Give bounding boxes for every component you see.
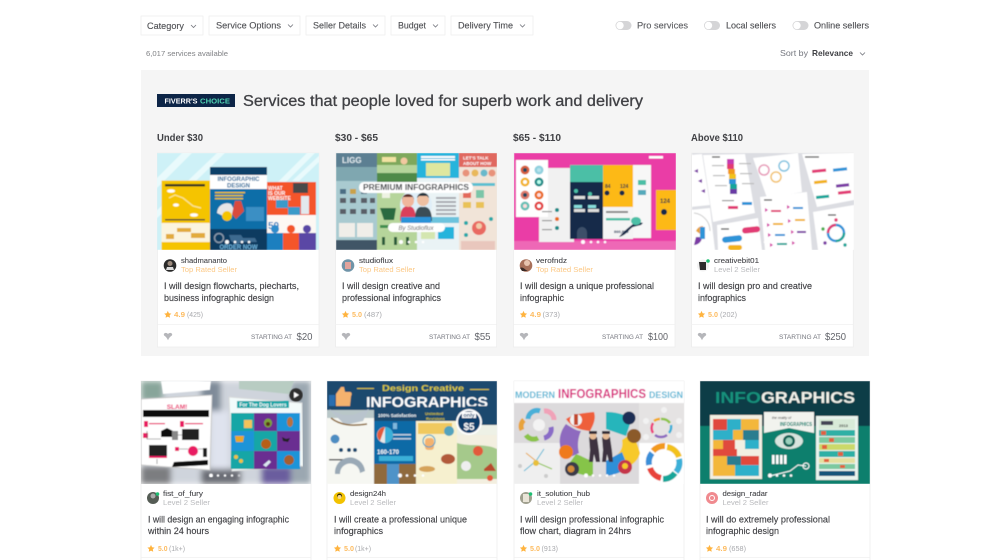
thumbnail: premium infographics: By Studioflux: [398, 226, 435, 232]
rating: (1k+): [169, 544, 185, 553]
thumbnail: modern infographics design: DESIGN: [649, 390, 683, 400]
gig title: [342, 281, 441, 303]
price: [779, 331, 846, 343]
badge: FIVERR'S: [164, 98, 198, 105]
rating: 4.9: [174, 310, 185, 319]
gig title: professional infographics: [342, 293, 441, 303]
seller avatar: [334, 492, 346, 504]
gig title: [520, 514, 664, 536]
seller name: verofndz: [536, 256, 567, 265]
thumbnail: infographics posters: INFOGRAPHICS: [780, 422, 812, 428]
thumbnail: infographic design: INFOGRAPHIC: [218, 177, 260, 183]
toggle: online sellers: Online sellers: [814, 20, 869, 30]
seller name: fist_of_fury: [163, 489, 203, 498]
rating: (373): [542, 310, 560, 319]
favourite heart: [520, 333, 528, 340]
thumbnail: design creative infographics: INFOGRAPHICS: [366, 395, 488, 411]
seller avatar: [706, 492, 718, 504]
thumbnail: infographic design: 50: [268, 221, 280, 232]
rating: 4.9: [530, 310, 541, 319]
filter: budget: [391, 16, 445, 35]
seller level: Level 2 Seller: [537, 498, 583, 507]
heading: Services that people loved for superb work and delivery: [243, 93, 643, 110]
gig title: [698, 281, 812, 303]
thumbnail: design creative infographics: 160-170: [377, 450, 400, 456]
thumbnail: pink infographic: 124: [660, 199, 671, 205]
thumbnail: infographic design: WHAT: [268, 186, 283, 192]
price: STARTING AT: [602, 334, 643, 341]
rating: [164, 310, 203, 319]
card: fist_of_fury: [141, 381, 311, 560]
filter bar: [141, 16, 533, 35]
thumbnail: design creative infographics: $5: [463, 422, 475, 433]
thumbnail: modern infographics design: MODERN: [515, 390, 555, 400]
thumbnail: infographics posters: 2013: [839, 423, 849, 428]
gig title: I will design a unique professional: [520, 281, 654, 291]
thumbnail: design creative infographics: Unlimited: [425, 411, 444, 416]
price: [602, 331, 668, 343]
price: STARTING AT: [251, 334, 292, 341]
thumbnail: premium infographics: [336, 153, 497, 250]
price: $250: [825, 331, 846, 343]
rating: (1k+): [355, 544, 371, 553]
gig title: I will design professional infographic: [520, 514, 664, 524]
toggles: [616, 20, 869, 30]
rating: [334, 544, 371, 553]
sort control: Relevance: [812, 48, 853, 58]
gig title: [520, 281, 654, 303]
gig title: I will create a professional unique: [334, 514, 467, 524]
thumbnail: infographic design: IS OUR: [268, 191, 286, 197]
gig title: I will design creative and: [342, 281, 440, 291]
filter: seller details: [306, 16, 385, 35]
gig title: [164, 281, 299, 303]
thumbnail: pink infographic: 124: [620, 184, 629, 190]
filter: delivery time: [451, 16, 533, 35]
seller avatar: [164, 259, 176, 272]
thumbnail: design creative infographics: Design Creative: [382, 383, 464, 393]
price label: 30 to 65: $30 - $65: [335, 133, 378, 144]
thumbnail: infographics posters: INFO: [715, 390, 761, 407]
seller avatar: [520, 259, 532, 272]
gig title: flow chart, diagram in 24hrs: [520, 526, 631, 536]
thumbnail: slam infographic with play button: [141, 381, 311, 484]
card: design_radar: [700, 381, 870, 560]
thumbnail: modern infographics design: INFOGRAPHICS: [558, 387, 646, 401]
price label: above 110: Above $110: [691, 133, 743, 144]
toggle: local sellers: Local sellers: [726, 20, 776, 30]
gig title: [147, 514, 289, 536]
thumbnail: infographic design: ORDER NOW: [220, 245, 258, 251]
seller level: Top Rated Seller: [181, 265, 238, 274]
gig title: [706, 514, 830, 536]
filter: seller details: Seller Details: [313, 20, 366, 30]
sort control: Sort by: [780, 48, 809, 58]
card: it_solution_hub: [514, 381, 684, 560]
gig title: infographics: [334, 526, 384, 536]
filter: category: Category: [147, 21, 184, 31]
filter: category: [141, 16, 203, 35]
rating: (658): [729, 544, 746, 553]
seller avatar: [520, 492, 532, 504]
rating: (425): [187, 310, 203, 319]
thumbnail: premium infographics: LIGG: [342, 156, 362, 165]
price: [251, 331, 313, 343]
rating: 5.0: [352, 310, 362, 319]
thumbnail: premium infographics: LET'S TALK: [463, 156, 489, 160]
badge: [157, 94, 235, 107]
gig title: business infographic design: [164, 293, 274, 303]
card: verofndz: [514, 153, 676, 347]
seller name: design24h: [350, 489, 386, 498]
gig title: infographics: [698, 293, 746, 303]
price: $20: [296, 331, 313, 343]
thumbnail: infographics posters: the reality of: [772, 416, 792, 420]
thumbnail: premium infographics: PREMIUM INFOGRAPHICS: [363, 183, 470, 192]
rating: 4.9: [716, 544, 727, 553]
rating: [698, 310, 737, 319]
seller name: studioflux: [359, 256, 393, 265]
seller avatar: [147, 492, 159, 504]
thumbnail: design creative infographics: [327, 381, 497, 484]
rating: [342, 310, 383, 319]
price: $55: [474, 331, 491, 343]
filter: delivery time: Delivery Time: [458, 20, 513, 30]
gig title: I will design flowcharts, piecharts,: [164, 281, 299, 291]
seller avatar: [342, 259, 354, 272]
toggle: pro services: Pro services: [637, 20, 689, 30]
favourite heart: [342, 333, 350, 340]
seller level: Top Rated Seller: [536, 265, 594, 274]
rating: (913): [542, 544, 558, 553]
badge: CHOICE: [200, 98, 230, 105]
thumbnail: design creative infographics: only: [463, 413, 476, 419]
seller avatar: [697, 259, 710, 272]
price: $100: [648, 331, 668, 343]
rating: (202): [720, 310, 737, 319]
card: creativebit01: [690, 153, 854, 347]
card: design24h: [327, 381, 497, 560]
seller level: Level 2 Seller: [350, 498, 396, 507]
price: STARTING AT: [429, 334, 470, 341]
thumbnail: slam infographic with play button: For The Dog Lovers: [239, 403, 287, 409]
rating: (487): [364, 310, 383, 319]
seller level: Level 2 Seller: [163, 498, 211, 507]
seller name: it_solution_hub: [537, 489, 590, 498]
seller level: Top Rated Seller: [359, 265, 416, 274]
card: shadmananto: [152, 153, 322, 347]
gig title: I will do extremely professional: [706, 514, 830, 524]
card: studioflux: [336, 153, 497, 347]
seller name: shadmananto: [181, 256, 227, 265]
filter: service options: [209, 16, 300, 35]
thumbnail: design creative infographics: 100% Satisfaction: [378, 413, 417, 418]
seller level: Level 2 Seller: [714, 265, 760, 274]
rating: [520, 310, 560, 319]
seller name: design_radar: [722, 489, 768, 498]
filter: service options: Service Options: [216, 20, 282, 30]
gig title: infographic: [520, 293, 564, 303]
thumbnail: premium infographics: ABOUT HOW: [463, 161, 492, 166]
thumbnail: infographics posters: [700, 381, 870, 484]
panel: fiverr's choice: [141, 70, 869, 356]
gig title: I will design an engaging infographic: [148, 514, 289, 524]
thumbnail: pink infographic: 84: [605, 184, 611, 190]
toggle: local sellers: [704, 20, 776, 30]
price: [429, 331, 491, 343]
rating: 5.0: [530, 544, 540, 553]
price label: 65 to 110: $65 - $110: [513, 133, 561, 144]
seller level: Level 2 Seller: [722, 498, 769, 507]
thumbnail: modern infographics design: [514, 381, 684, 484]
thumbnail: design creative infographics: Revisions: [426, 416, 446, 421]
rating: 5.0: [708, 310, 718, 319]
favourite heart: [698, 333, 706, 340]
rating: 5.0: [158, 544, 168, 553]
rating: [706, 544, 746, 553]
toggle: pro services: [616, 20, 689, 30]
thumbnail: infographic design: [152, 153, 322, 251]
rating: [520, 544, 558, 553]
sort control: [780, 48, 865, 58]
thumbnail: pink infographic: 860,800: [614, 229, 629, 234]
price: STARTING AT: [779, 334, 821, 341]
gig title: [334, 514, 467, 536]
thumbnail: infographic sheets: [690, 153, 854, 250]
thumbnail: slam infographic with play button: SLAM!: [167, 404, 187, 411]
gig title: infographic design: [706, 526, 779, 536]
thumbnail: pink infographic: [514, 153, 676, 250]
price label: under 30: Under $30: [157, 133, 203, 144]
thumbnail: infographic design: WEBSITE: [268, 196, 291, 202]
seller name: creativebit01: [714, 256, 759, 265]
rating: [147, 544, 185, 553]
thumbnail: infographic design: DESIGN: [227, 184, 250, 190]
gig title: I will design pro and creative: [698, 281, 812, 291]
gig title: within 24 hours: [147, 526, 209, 536]
favourite heart: [164, 333, 172, 340]
thumbnail: infographics posters: GRAPHICS: [761, 390, 855, 407]
filter: budget: Budget: [398, 20, 426, 30]
services count: 6,017 services available: [146, 49, 228, 58]
rating: 5.0: [344, 544, 354, 553]
